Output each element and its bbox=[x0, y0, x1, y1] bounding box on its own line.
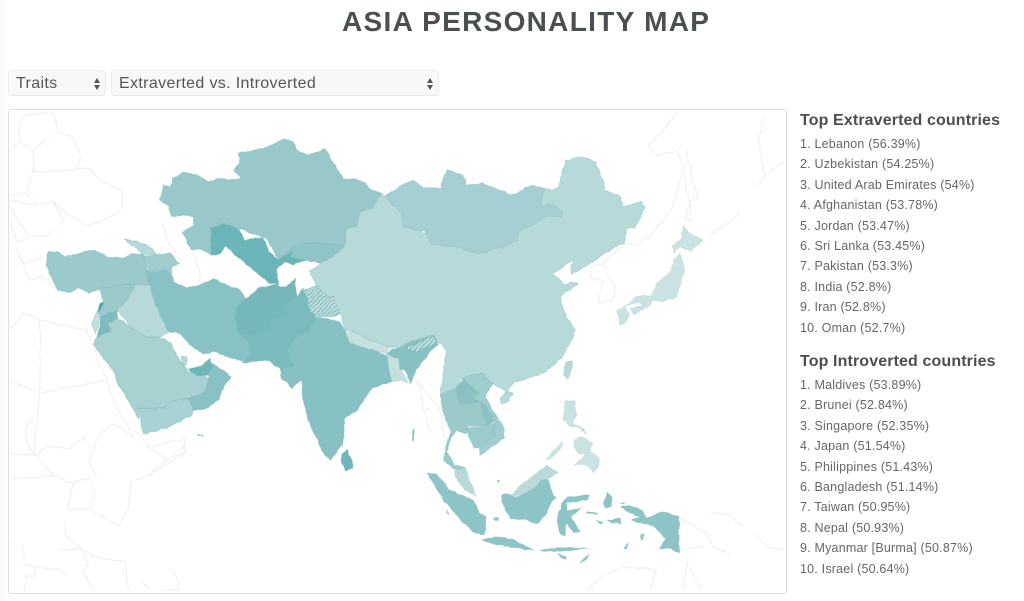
Thailand bbox=[440, 388, 487, 472]
Pakistan bbox=[238, 288, 317, 370]
Laos bbox=[456, 378, 495, 425]
Israel bbox=[92, 313, 99, 333]
Syria bbox=[98, 284, 135, 317]
Bangladesh bbox=[387, 355, 408, 383]
faint east asia borders bbox=[417, 113, 785, 590]
ranked list: extraverted: 7. Pakistan (53.3%) bbox=[800, 259, 913, 273]
ranked list: introverted: 4. Japan (51.54%) bbox=[800, 439, 906, 453]
Lebanon bbox=[97, 303, 104, 313]
dropdown: trait pair: Extraverted vs. Introverted bbox=[119, 75, 316, 92]
Kashmir disputed area bbox=[302, 286, 340, 317]
Hainan bbox=[500, 392, 513, 403]
China bbox=[310, 157, 645, 395]
Sri Lanka bbox=[342, 449, 353, 471]
Japan bbox=[617, 225, 703, 325]
dropdown: traits bbox=[8, 70, 106, 96]
Turkey bbox=[47, 250, 150, 293]
ranked list: introverted: 2. Brunei (52.84%) bbox=[800, 398, 908, 412]
ranked list: introverted: 6. Bangladesh (51.14%) bbox=[800, 480, 939, 494]
heading: top introverted: Top Introverted countries bbox=[800, 353, 996, 370]
Kyrgyzstan bbox=[278, 243, 345, 263]
Georgia bbox=[123, 239, 157, 255]
ranked list: extraverted: 5. Jordan (53.47%) bbox=[800, 219, 910, 233]
countries: west and central asia bbox=[47, 139, 393, 471]
Kazakhstan bbox=[159, 139, 382, 260]
Malaysia bbox=[455, 465, 558, 497]
Indonesia bbox=[411, 428, 679, 563]
ranked list: extraverted: 10. Oman (52.7%) bbox=[800, 321, 905, 335]
ranked list: extraverted: 2. Uzbekistan (54.25%) bbox=[800, 157, 934, 171]
ranked list: extraverted: 4. Afghanistan (53.78%) bbox=[800, 198, 938, 212]
heading: top extraverted: Top Extraverted countries bbox=[800, 112, 1000, 129]
Yemen bbox=[138, 398, 194, 434]
Qatar bbox=[182, 357, 187, 366]
countries: east asia bbox=[310, 157, 703, 563]
Azerbaijan and Armenia bbox=[143, 253, 179, 275]
title: ASIA PERSONALITY MAP bbox=[342, 6, 710, 37]
list: top introverted countries bbox=[800, 353, 996, 576]
United Arab Emirates bbox=[188, 358, 213, 376]
Cambodia bbox=[467, 423, 495, 448]
Saudi Arabia bbox=[93, 318, 209, 418]
Mongolia bbox=[386, 169, 563, 254]
ranked list: extraverted: 3. United Arab Emirates (54%) bbox=[800, 178, 975, 192]
ranked list: introverted: 10. Israel (50.64%) bbox=[800, 562, 909, 576]
list: top extraverted countries bbox=[800, 112, 1000, 335]
Uzbekistan bbox=[211, 223, 305, 285]
dropdown: trait pair bbox=[111, 70, 439, 96]
Socotra bbox=[197, 434, 203, 436]
Nepal bbox=[345, 332, 388, 354]
Taiwan bbox=[563, 361, 573, 380]
faint neighbouring borders bbox=[9, 112, 200, 591]
India bbox=[280, 317, 393, 460]
ranked list: extraverted: 9. Iran (52.8%) bbox=[800, 300, 886, 314]
ranked list: extraverted: 8. India (52.8%) bbox=[800, 280, 891, 294]
Iran bbox=[146, 268, 250, 362]
ranked list: introverted: 7. Taiwan (50.95%) bbox=[800, 500, 910, 514]
ranked list: extraverted: 6. Sri Lanka (53.45%) bbox=[800, 239, 925, 253]
Bhutan and north-east India bbox=[387, 335, 438, 383]
map of Asia bbox=[9, 112, 784, 591]
Oman bbox=[188, 363, 232, 411]
Iraq bbox=[117, 285, 168, 337]
ranked list: extraverted bbox=[800, 137, 975, 335]
ranked list: introverted: 1. Maldives (53.89%) bbox=[800, 378, 921, 392]
dropdown: traits: Traits bbox=[16, 75, 58, 92]
Philippines bbox=[547, 401, 600, 473]
Afghanistan bbox=[235, 278, 297, 336]
ranked list: introverted: 5. Philippines (51.43%) bbox=[800, 460, 933, 474]
ranked list: introverted: 9. Myanmar [Burma] (50.87%) bbox=[800, 541, 973, 555]
Arunachal disputed area bbox=[407, 336, 437, 351]
ranked list: extraverted: 1. Lebanon (56.39%) bbox=[800, 137, 921, 151]
Jordan bbox=[97, 310, 118, 337]
ranked list: introverted: 3. Singapore (52.35%) bbox=[800, 419, 929, 433]
ranked list: introverted: 8. Nepal (50.93%) bbox=[800, 521, 904, 535]
Vietnam bbox=[462, 373, 505, 456]
panel: map frame bbox=[8, 109, 787, 594]
ranked list: introverted bbox=[800, 378, 973, 576]
Aksai Chin bbox=[333, 297, 343, 303]
